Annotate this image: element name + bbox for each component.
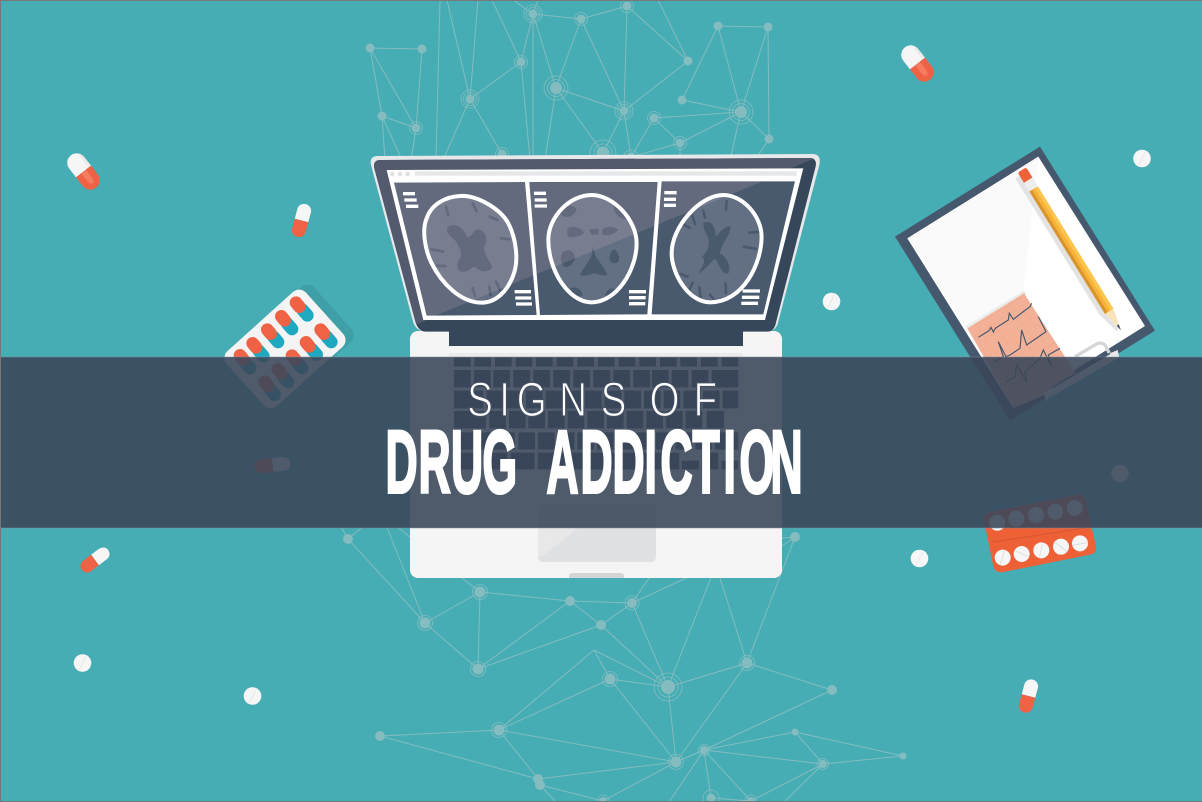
clipboard board [895, 147, 1155, 421]
brain scan right [672, 195, 762, 302]
laptop screen [371, 154, 820, 332]
browser bar [390, 171, 797, 176]
blister sheet [221, 286, 349, 412]
blister capsules [240, 303, 331, 395]
ECG sheet [965, 291, 1080, 408]
icon: clipboard with ECG and pencil [895, 147, 1155, 421]
icon: capsule bottom right [1017, 678, 1040, 714]
laptop base [410, 329, 782, 578]
scan panels [394, 181, 795, 316]
tablet sheet [984, 495, 1096, 572]
title: signs of: SIGNS OF [467, 374, 717, 427]
icons: round pills [74, 150, 1151, 705]
screen frame [387, 168, 803, 320]
title: drug addiction: DRUG ADDICTION [386, 412, 803, 511]
paper sheet [907, 157, 1145, 408]
hinge [449, 329, 743, 346]
brain outlines [424, 195, 762, 303]
screen glare [394, 182, 762, 316]
banner edge lines [0, 357, 1202, 528]
network graph: top [366, 0, 774, 166]
scan label bars [403, 193, 760, 304]
blister shadow [229, 281, 358, 407]
icon: capsule lower left [78, 545, 112, 575]
screen lid [371, 154, 820, 331]
brain scan left [424, 196, 516, 303]
icon: capsule behind banner [254, 456, 291, 474]
icon: capsule top right [897, 41, 938, 86]
tablets [989, 500, 1088, 566]
clipboard clip [1044, 343, 1119, 400]
icon: capsule blister pack [221, 281, 358, 412]
trackpad [538, 505, 656, 562]
brain scan middle [548, 195, 637, 302]
icon: capsule left [63, 149, 104, 194]
icon: capsule centre left [290, 202, 313, 239]
banner [0, 357, 1202, 528]
laptop notch [569, 573, 624, 578]
pencil [1013, 167, 1125, 336]
icon: orange tablet blister pack [984, 495, 1096, 572]
keyboard [454, 357, 738, 469]
network graph: bottom [340, 525, 906, 802]
